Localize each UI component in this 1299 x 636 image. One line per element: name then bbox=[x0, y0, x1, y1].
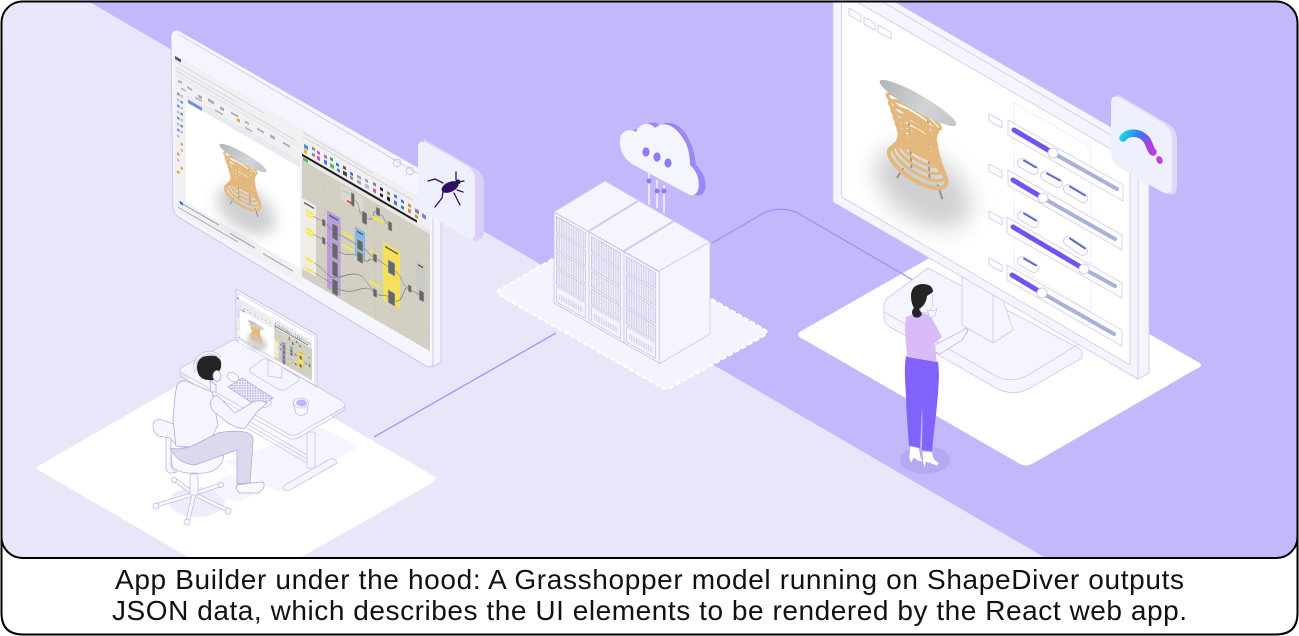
builder trousers bbox=[170, 431, 253, 484]
user raised hand bbox=[927, 308, 937, 318]
cup bbox=[293, 398, 308, 416]
builder shoe bbox=[236, 482, 264, 493]
slider row 1 bbox=[1008, 120, 1123, 201]
rack top dividers bbox=[589, 201, 674, 251]
user hair bbox=[911, 284, 933, 318]
caption bbox=[112, 564, 1187, 626]
slider row 2 bbox=[1008, 170, 1122, 250]
keyboard bbox=[228, 378, 273, 408]
right monitor bezel bbox=[833, 0, 1149, 379]
user floor shadow bbox=[900, 446, 950, 474]
ui layout guide bbox=[1014, 103, 1091, 312]
model: stool bbox=[860, 74, 986, 245]
rack 1 front bbox=[554, 212, 589, 323]
toggle pills bbox=[1022, 160, 1085, 268]
left monitor bbox=[171, 30, 441, 367]
stand neck bbox=[962, 265, 1013, 343]
caption line 2: JSON data, which describes the UI elements to be rendered by the React web app. bbox=[112, 595, 1187, 626]
icon: cloud bbox=[620, 123, 706, 196]
builder torso bbox=[173, 381, 218, 447]
small stool model bbox=[246, 320, 268, 352]
caption line 1: App Builder under the hood: A Grasshopper model running on ShapeDiver outputs bbox=[115, 564, 1184, 595]
icon: grasshopper bug bbox=[428, 172, 464, 207]
model: stool bbox=[207, 140, 285, 245]
user front arm bbox=[935, 328, 968, 354]
icon: shapediver logo bbox=[1123, 133, 1164, 165]
slider row 4 bbox=[1007, 265, 1122, 346]
builder headphones bbox=[195, 353, 221, 382]
platform: server dashed bbox=[496, 258, 768, 390]
connector: builder to server bbox=[374, 333, 556, 437]
right monitor bbox=[833, 0, 1149, 379]
slider row 3 bbox=[1007, 217, 1122, 298]
user shoes bbox=[909, 446, 923, 463]
chair backrest bbox=[153, 420, 188, 447]
server racks bbox=[554, 181, 710, 364]
window buttons bbox=[849, 8, 891, 39]
caption frame bbox=[2, 535, 1298, 634]
chair seat bbox=[171, 452, 224, 473]
small monitor screen bbox=[237, 297, 312, 383]
chair backrest post bbox=[166, 433, 177, 473]
chair column bbox=[190, 474, 198, 495]
window buttons bbox=[393, 159, 414, 175]
chair floor shadows bbox=[169, 487, 225, 517]
stand base bbox=[884, 268, 1082, 393]
person: builder bbox=[170, 353, 267, 493]
icon card: shapediver bbox=[1111, 94, 1177, 194]
user shirt bbox=[905, 312, 942, 362]
user trousers bbox=[905, 356, 939, 451]
office chair bbox=[153, 420, 255, 525]
icon card: grasshopper bbox=[418, 139, 484, 241]
desk top bbox=[180, 340, 345, 436]
desk foot bbox=[283, 459, 337, 491]
rack 2 front bbox=[589, 232, 624, 343]
small monitor stand bbox=[250, 359, 299, 390]
rack top faces bbox=[554, 181, 710, 271]
builder hair bbox=[197, 356, 221, 380]
desk frame beams bbox=[247, 420, 307, 463]
connector: server to web app bbox=[712, 209, 918, 283]
rack side face bbox=[659, 242, 710, 364]
platform: web app bbox=[798, 258, 1201, 466]
cloud data links bbox=[646, 172, 666, 213]
rack 3 front bbox=[624, 252, 659, 363]
chair casters bbox=[153, 478, 231, 525]
user face bbox=[920, 291, 933, 313]
right monitor stand bbox=[884, 265, 1082, 393]
builder collar bbox=[210, 381, 216, 392]
mouse bbox=[227, 372, 239, 382]
desk leg bbox=[307, 432, 315, 468]
left monitor screen bbox=[175, 55, 430, 359]
chair base legs fill bbox=[157, 480, 227, 520]
person: web app user bbox=[900, 284, 968, 474]
left monitor side bbox=[432, 172, 441, 367]
right monitor screen bbox=[842, 0, 1130, 365]
light floor area bbox=[0, 0, 1049, 560]
chair base legs outline bbox=[157, 480, 227, 520]
desk bbox=[180, 340, 345, 491]
small monitor bbox=[236, 289, 317, 387]
builder arm bbox=[210, 395, 267, 428]
parameter labels bbox=[989, 114, 1002, 272]
small desk shadow bbox=[225, 427, 358, 492]
platform: builder desk bbox=[36, 378, 436, 557]
left monitor bezel bbox=[171, 30, 433, 367]
